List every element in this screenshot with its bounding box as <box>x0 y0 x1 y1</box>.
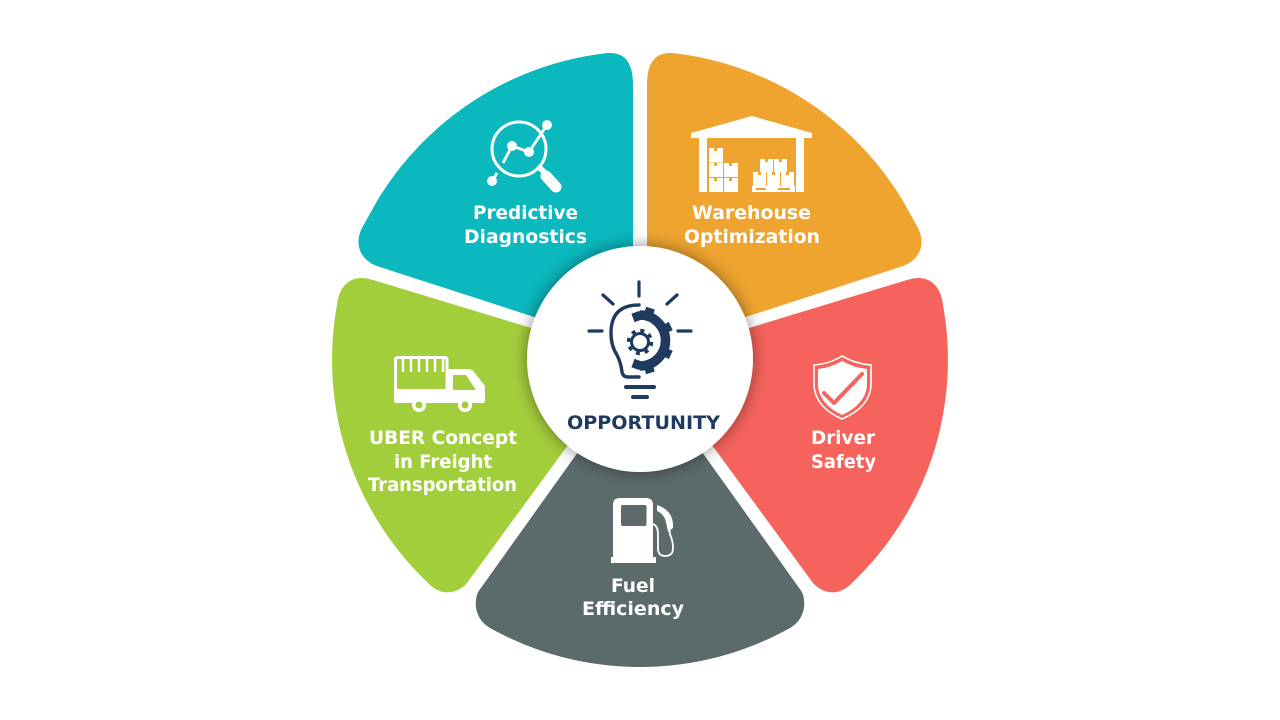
label: opportunity: OPPORTUNITY <box>567 413 721 434</box>
label: driver safety <box>811 427 877 473</box>
icon: shield with check <box>814 356 871 419</box>
label: warehouse optimization: Warehouse <box>692 202 811 224</box>
label: driver safety: Driver <box>811 427 876 449</box>
label: uber concept in freight transportation: in Freight <box>394 451 492 473</box>
label: uber concept in freight transportation: UBER Concept <box>369 427 517 449</box>
icon: magnifier with chart <box>487 120 556 187</box>
label: uber concept in freight transportation <box>368 427 517 496</box>
label: predictive diagnostics: Predictive <box>473 202 578 224</box>
label: fuel efficiency: Fuel <box>611 575 655 597</box>
icon: light bulb with gears <box>589 282 691 397</box>
panel: uber concept in freight transportation <box>332 278 630 592</box>
label: uber concept in freight transportation: Transportation <box>368 474 517 496</box>
icon: truck <box>394 358 485 412</box>
panel: fuel efficiency <box>476 400 804 667</box>
label: predictive diagnostics <box>464 202 587 248</box>
label: fuel efficiency <box>582 575 685 620</box>
panel: driver safety <box>650 278 948 592</box>
label: warehouse optimization <box>684 202 820 248</box>
icon: fuel pump <box>611 498 673 563</box>
label: driver safety: Safety <box>811 451 877 473</box>
panel: warehouse optimization <box>647 53 922 349</box>
panel: predictive diagnostics <box>358 53 633 349</box>
label: warehouse optimization: Optimization <box>684 226 820 248</box>
label: fuel efficiency: Efficiency <box>582 598 685 620</box>
panel: center opportunity circle <box>527 246 753 472</box>
icon: warehouse <box>691 116 812 192</box>
label: predictive diagnostics: Diagnostics <box>464 226 587 248</box>
